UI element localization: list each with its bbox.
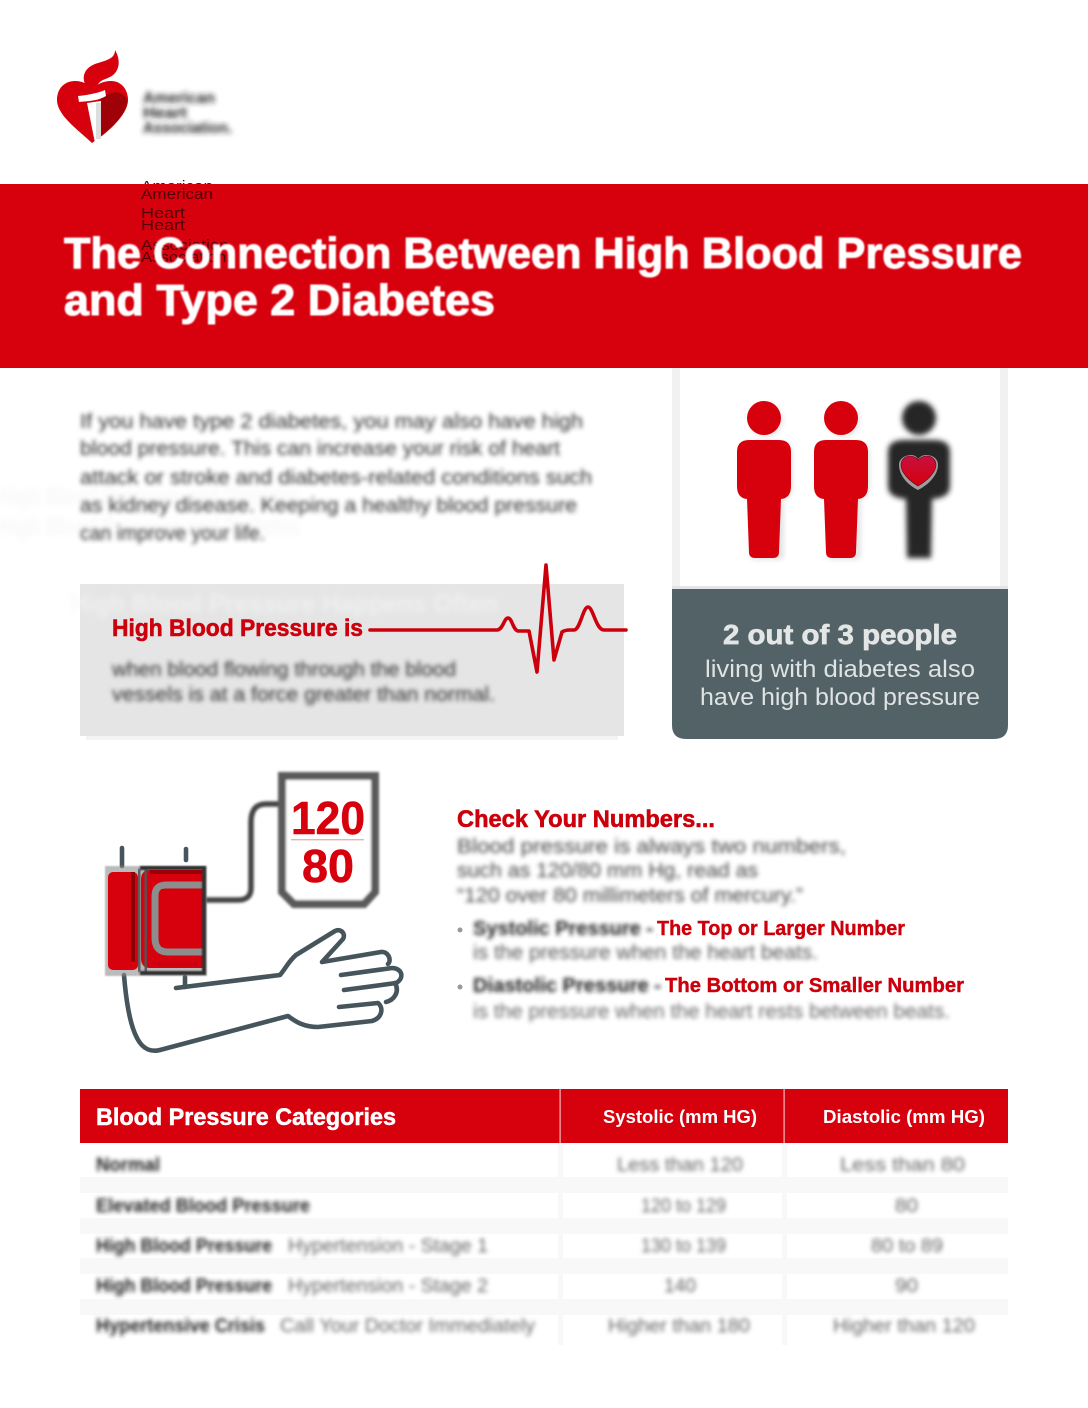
row: crisis: Higher than 180 (608, 1316, 750, 1337)
icon: heart (899, 455, 938, 490)
bullet: systolic: Systolic Pressure - (473, 918, 653, 940)
ghost logo text on banner: American (141, 186, 213, 203)
table header: Diastolic (mm HG) (823, 1107, 985, 1127)
intro paragraph: as kidney disease. Keeping a healthy blood pressure (80, 495, 577, 517)
ghost logo text on banner: Heart (141, 217, 186, 234)
title: and Type 2 Diabetes (64, 276, 495, 325)
heading: Check Your Numbers... (457, 806, 715, 833)
row: crisis: Hypertensive Crisis (96, 1316, 265, 1337)
faint ghost text left of intro (0, 481, 300, 541)
row: stage 1 (96, 1236, 943, 1257)
bullet: systolic: The Top or Larger Number (657, 918, 905, 940)
row: crisis: Higher than 120 (833, 1316, 975, 1337)
row: elevated (96, 1196, 918, 1217)
row: elevated: 80 (895, 1196, 918, 1217)
row: stage 1: Hypertension - Stage 1 (288, 1236, 488, 1257)
intro paragraph: blood pressure. This can increase your risk of heart (80, 438, 560, 460)
person 1 (737, 401, 791, 558)
arm (122, 848, 401, 1051)
row: stage 2: Hypertension - Stage 2 (288, 1276, 488, 1297)
row: stage 2: High Blood Pressure (96, 1276, 272, 1297)
section: check your numbers (457, 806, 964, 1023)
statistic headline: 2 out of 3 people (723, 619, 957, 650)
bullet: systolic (458, 918, 905, 964)
panel: statistic card (672, 368, 1008, 739)
statistic panel (672, 586, 1008, 739)
intro paragraph: can improve your life. (80, 523, 265, 545)
table header (80, 1089, 1008, 1143)
person 3 (888, 401, 950, 558)
ghost logo text above banner: American (141, 178, 213, 195)
logo (57, 50, 232, 143)
statistic text: have high blood pressure (700, 684, 980, 711)
statistic text: living with diabetes also (705, 656, 975, 683)
reading 80: 80 (302, 840, 354, 892)
ghost logo text on banner: Association. (141, 249, 231, 266)
bullet: diastolic: Diastolic Pressure - (473, 975, 661, 997)
bullet: diastolic: is the pressure when the heart rests between beats. (473, 1001, 950, 1023)
row: stage 2: 90 (895, 1276, 918, 1297)
row: crisis (96, 1316, 975, 1337)
row: stage 2 (96, 1276, 918, 1297)
ghost logo text on banner: Heart (141, 205, 186, 222)
row: stage 1: 130 to 139 (641, 1236, 726, 1257)
ghost logo text on banner (141, 186, 231, 266)
icon: people (737, 401, 950, 560)
row: stage 2: 140 (664, 1276, 696, 1297)
row: crisis: Call Your Doctor Immediately (280, 1316, 536, 1337)
description: vessels is at a force greater than normal. (112, 684, 495, 706)
intro text (457, 836, 846, 907)
bullet: diastolic: The Bottom or Smaller Number (665, 975, 964, 997)
row: elevated: Elevated Blood Pressure (96, 1196, 310, 1217)
table header: Systolic (mm HG) (603, 1107, 757, 1127)
row: stage 1: High Blood Pressure (96, 1236, 272, 1257)
intro text: such as 120/80 mm Hg, read as (457, 860, 758, 882)
intro paragraph (80, 411, 592, 545)
faint ghost text left of intro: High Blood Pressure and Diabetes (0, 481, 300, 511)
table: blood pressure categories (80, 1089, 1008, 1345)
title: The Connection Between High Blood Pressure (64, 229, 1022, 278)
logo text blurred: American (143, 90, 215, 107)
ghost text in panel: High Blood Pressure Happens Often (70, 588, 498, 618)
table header: Blood Pressure Categories (96, 1104, 396, 1131)
intro text: Blood pressure is always two numbers, (457, 836, 846, 858)
row: normal (96, 1155, 965, 1176)
faint ghost text left of intro: High Blood Pressure and Diabetes (0, 511, 300, 541)
banner (0, 184, 1088, 368)
intro paragraph: attack or stroke and diabetes-related conditions such (80, 467, 592, 489)
illustration: cuff, monitor and arm (105, 776, 401, 1051)
ECG line (370, 565, 626, 672)
ghost logo text on banner: Association (141, 237, 229, 254)
logo text blurred (143, 90, 232, 137)
row: elevated: 120 to 129 (641, 1196, 726, 1217)
icon: heart and torch (57, 50, 128, 143)
intro text: “120 over 80 millimeters of mercury.” (457, 885, 803, 907)
title (64, 229, 1022, 325)
row: stage 1: 80 to 89 (871, 1236, 943, 1257)
description: when blood flowing through the blood (111, 659, 456, 681)
logo text blurred: Association. (143, 120, 232, 137)
reading 120: 120 (291, 792, 365, 844)
row: normal: Less than 120 (617, 1155, 743, 1176)
person 2 (814, 401, 868, 558)
bullet: diastolic (458, 975, 964, 1023)
heading: High Blood Pressure is (112, 615, 363, 642)
tube (205, 804, 282, 900)
cuff (105, 866, 207, 976)
bullet: systolic: is the pressure when the heart beats. (473, 942, 818, 964)
table stripes (80, 1143, 1008, 1345)
logo text blurred: Heart (143, 105, 188, 122)
intro paragraph: If you have type 2 diabetes, you may also have high (80, 411, 583, 433)
panel: high blood pressure definition (70, 565, 626, 740)
row: normal: Normal (96, 1155, 160, 1176)
monitor (282, 776, 375, 904)
row: normal: Less than 80 (840, 1155, 965, 1176)
statistic text (700, 656, 980, 711)
description (111, 659, 495, 706)
